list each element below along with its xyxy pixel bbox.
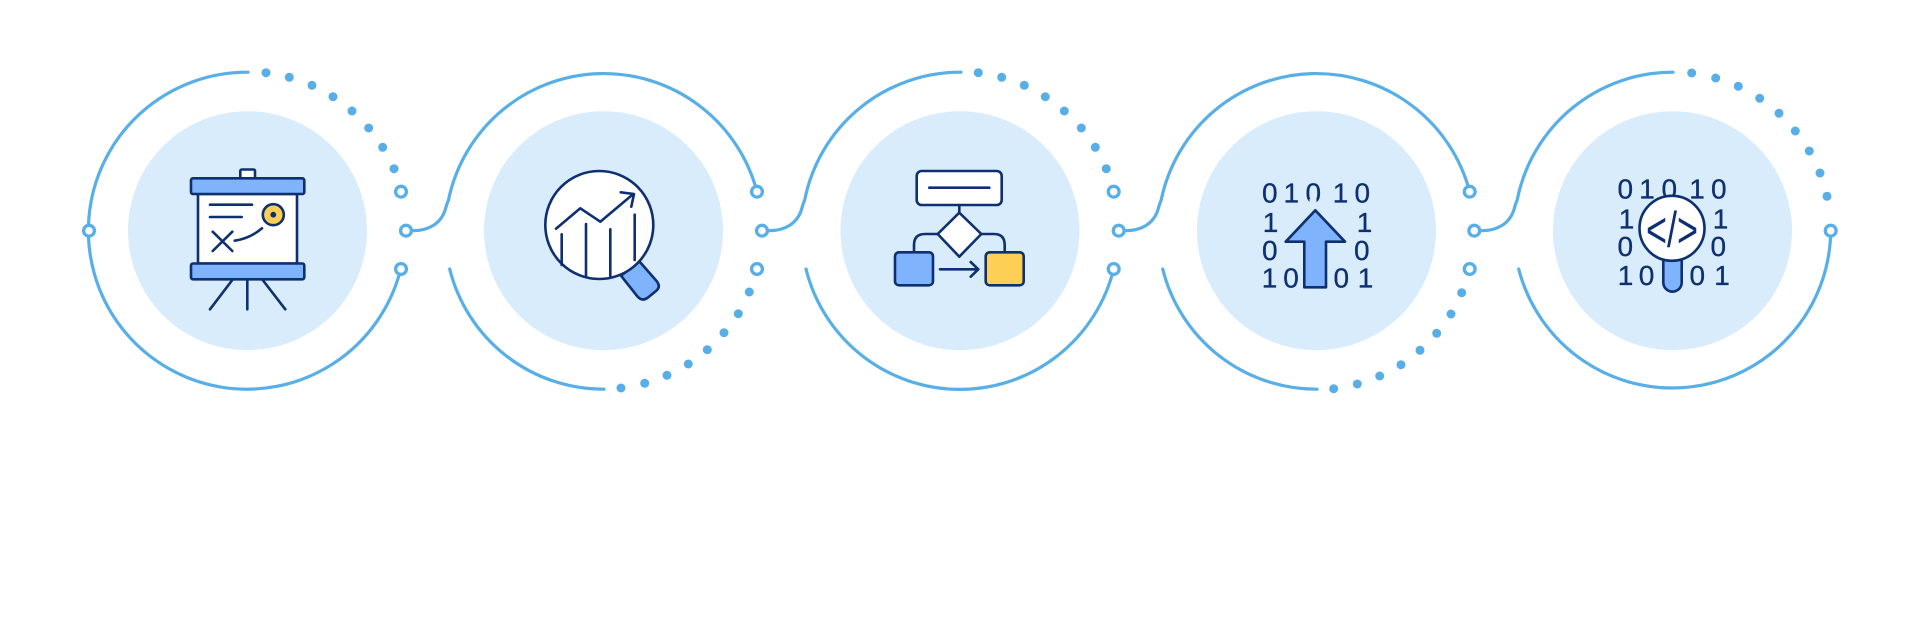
ring arc 1 <box>88 72 401 389</box>
icon: binary digits with code magnifier: 1 <box>1713 204 1728 234</box>
panel: presentation strategy board <box>84 68 411 389</box>
dotted arc 3 <box>974 68 1111 173</box>
panel: flowchart <box>768 68 1124 389</box>
icon: binary digits with up arrow: 1 <box>1357 207 1372 238</box>
icon: binary digits with up arrow: 01010 <box>1262 178 1370 209</box>
ring arc 2 <box>412 74 757 389</box>
icon: magnifier with growth chart <box>545 171 659 300</box>
icon: binary digits with up arrow: 0 <box>1262 235 1278 266</box>
icon: binary digits with code magnifier: 0 <box>1618 231 1633 262</box>
icon: binary digits with code magnifier: 1001 <box>1618 260 1730 291</box>
icon: binary digits with code magnifier: 0 <box>1710 231 1726 262</box>
background disc 5 <box>1553 111 1792 350</box>
background disc 2 <box>484 111 723 350</box>
background disc 4 <box>1197 111 1436 350</box>
icon: binary digits with up arrow: 1 <box>1263 207 1278 238</box>
code symbol: </> <box>1646 202 1698 259</box>
icon: binary digits with code magnifier: 1 <box>1619 204 1634 234</box>
dotted arc 4 <box>1329 288 1466 393</box>
ring nodes 1 <box>84 186 411 274</box>
ring node 5 <box>1825 225 1836 236</box>
icon: presentation board <box>191 170 304 309</box>
ring arc 3 <box>768 72 1114 389</box>
ring nodes 3 <box>1108 186 1124 274</box>
background disc 1 <box>128 111 367 350</box>
ring arc 5 <box>1481 72 1831 388</box>
panel: code search <box>1481 68 1836 388</box>
dotted arc 1 <box>262 68 398 173</box>
icon: flowchart <box>895 171 1024 285</box>
panel: analytics magnifier <box>412 74 767 392</box>
icon: binary digits with code magnifier: 01010 <box>1618 173 1727 204</box>
dotted arc 5 <box>1687 68 1832 201</box>
dotted arc 2 <box>616 288 754 392</box>
panel: binary data upload <box>1125 74 1480 393</box>
icon: binary digits with up arrow: 1001 <box>1262 263 1373 294</box>
background disc 3 <box>840 111 1080 350</box>
icon: binary digits with code magnifier <box>1618 173 1730 292</box>
ring nodes 2 <box>752 186 767 274</box>
icon: binary digits with up arrow <box>1262 178 1373 294</box>
ring nodes 4 <box>1464 186 1480 274</box>
icon: binary digits with up arrow: 0 <box>1354 235 1370 266</box>
ring arc 4 <box>1125 74 1470 389</box>
